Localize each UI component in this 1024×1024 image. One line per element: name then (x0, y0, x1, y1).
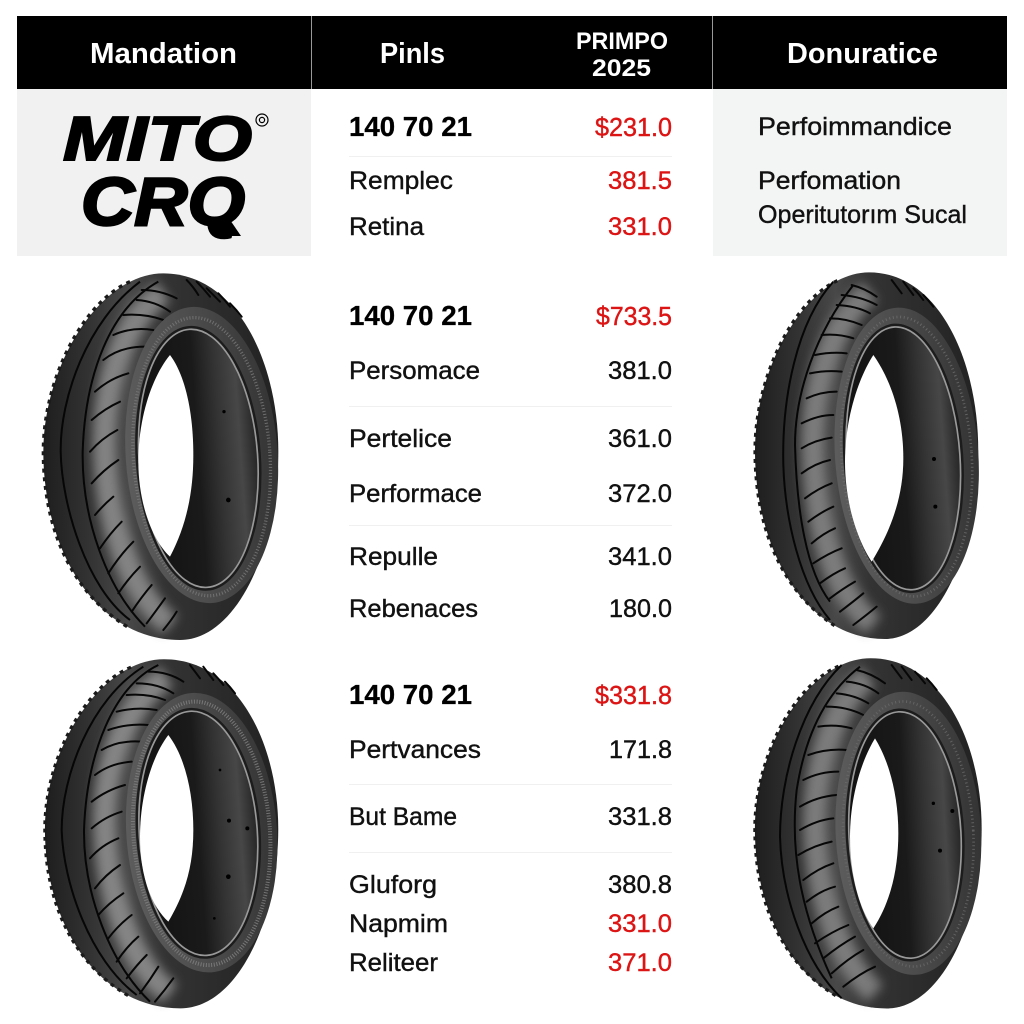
price block 2: 341.0 (608, 543, 672, 571)
icon: tire top right (755, 272, 989, 639)
price block 2: 180.0 (609, 595, 672, 623)
price block 2: $733.5 (596, 301, 672, 331)
price block 1: Remplec (349, 167, 453, 195)
table header bar: 2025 (592, 55, 651, 82)
table header bar: PRIMPO (576, 28, 668, 55)
price block 3: 380.8 (608, 871, 672, 899)
price block 2 (349, 300, 672, 623)
price block 3: 140 70 21 (349, 679, 472, 710)
price block 1: 381.5 (608, 167, 672, 195)
table header bar: Mandation (90, 38, 237, 70)
price block 2: Rebenaces (349, 595, 478, 623)
price block 2: Pertelice (349, 425, 452, 453)
price block 1: 140 70 21 (349, 111, 472, 142)
panel: description: Perfoimmandice (758, 113, 952, 141)
price block 1: Retina (349, 213, 424, 241)
price block 3 (349, 679, 672, 977)
price block 1: $231.0 (595, 112, 672, 142)
table header bar (17, 16, 1007, 89)
price block 3: 331.0 (608, 910, 672, 938)
panel: brand logo: MITO (63, 105, 252, 174)
price block 1 (349, 111, 672, 241)
panel: description: Operitutorım Sucal (758, 201, 967, 229)
price block 3: $331.8 (595, 680, 672, 710)
price block 2: Performace (349, 480, 482, 508)
price block 2: Persomace (349, 357, 480, 385)
price block 2: Repulle (349, 543, 438, 571)
price block 3: 371.0 (608, 949, 672, 977)
price block 1: 331.0 (608, 213, 672, 241)
price block 2: 372.0 (608, 480, 672, 508)
icon: tire bottom right (755, 658, 988, 1008)
table header bar: Donuratice (787, 38, 938, 70)
price block 3: 171.8 (609, 736, 672, 764)
price block 3: But Bame (349, 803, 457, 831)
panel: brand logo: CRQ (81, 164, 245, 240)
icon: tire top left (43, 273, 288, 640)
price block 3: 331.8 (608, 803, 672, 831)
panel: brand logo (17, 89, 311, 256)
price block 3: Napmim (349, 910, 448, 938)
table header bar: Pinls (380, 38, 445, 70)
icon: tire bottom left (45, 659, 287, 1008)
price block 3: Reliteer (349, 949, 438, 977)
price block 2: 361.0 (608, 425, 672, 453)
panel: description: Perfomation (758, 167, 901, 195)
panel: description (713, 89, 1007, 256)
price block 3: Pertvances (349, 736, 481, 764)
price block 2: 140 70 21 (349, 300, 472, 331)
price block 2: 381.0 (608, 357, 672, 385)
price block 3: Gluforg (349, 871, 437, 899)
